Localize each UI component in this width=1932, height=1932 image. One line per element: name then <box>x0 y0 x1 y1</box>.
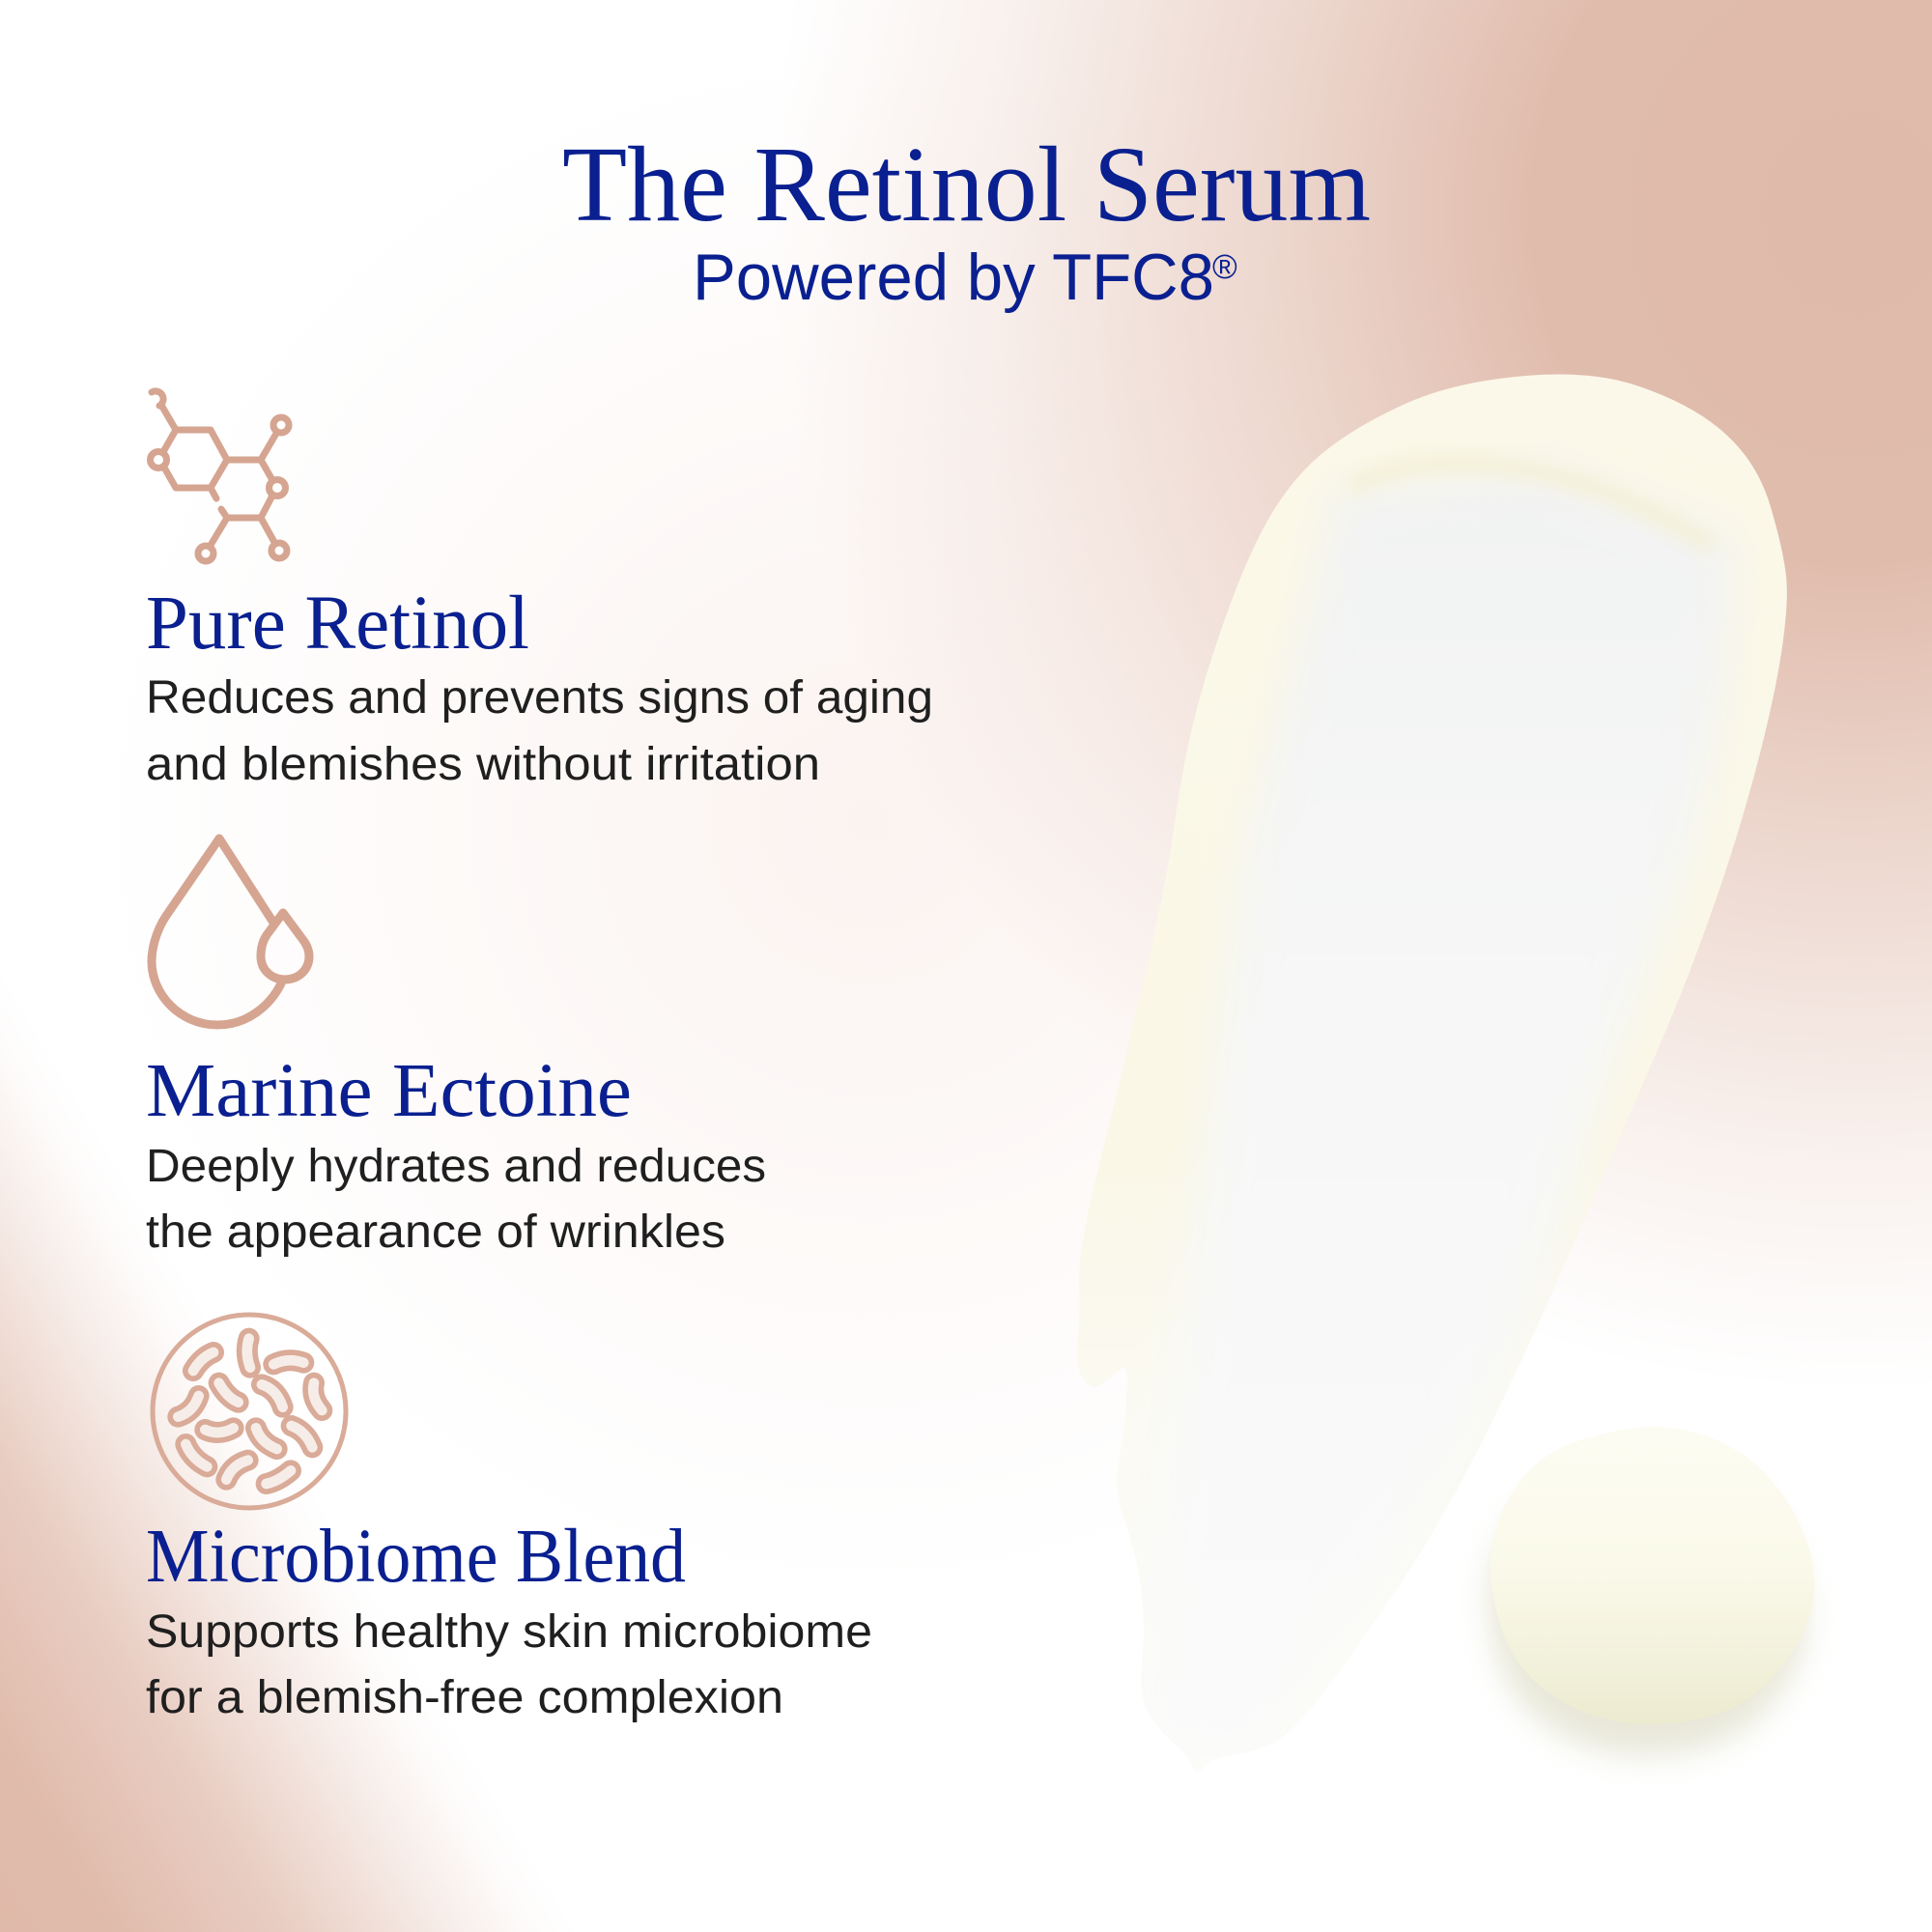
icon: molecule <box>151 391 289 561</box>
text: Pure Retinol description: and blemishes without irritation <box>146 739 820 790</box>
cream swatch smear <box>1077 375 1787 1652</box>
heading: Microbiome Blend: Microbiome Blend <box>146 1515 686 1599</box>
text: Marine Ectoine description <box>146 1141 766 1258</box>
text: Pure Retinol description <box>146 672 933 790</box>
text: Microbiome Blend description: for a blemish-free complexion <box>146 1672 783 1723</box>
text: Pure Retinol description: Reduces and prevents signs of aging <box>146 672 933 724</box>
cream dollop <box>1489 1427 1815 1756</box>
text: Marine Ectoine description: Deeply hydrates and reduces <box>146 1141 766 1192</box>
subtitle: ® <box>1212 248 1237 286</box>
subtitle: Powered by TFC8 <box>693 241 1214 314</box>
icon: microbiome <box>153 1315 346 1508</box>
title: The Retinol Serum <box>562 126 1371 244</box>
icon: water drops <box>152 838 309 1025</box>
heading: Pure Retinol: Pure Retinol <box>146 582 529 666</box>
heading: Marine Ectoine: Marine Ectoine <box>146 1049 632 1133</box>
text: Microbiome Blend description: Supports healthy skin microbiome <box>146 1606 872 1658</box>
text: Marine Ectoine description: the appearance of wrinkles <box>146 1207 725 1258</box>
text: Microbiome Blend description <box>146 1606 872 1723</box>
